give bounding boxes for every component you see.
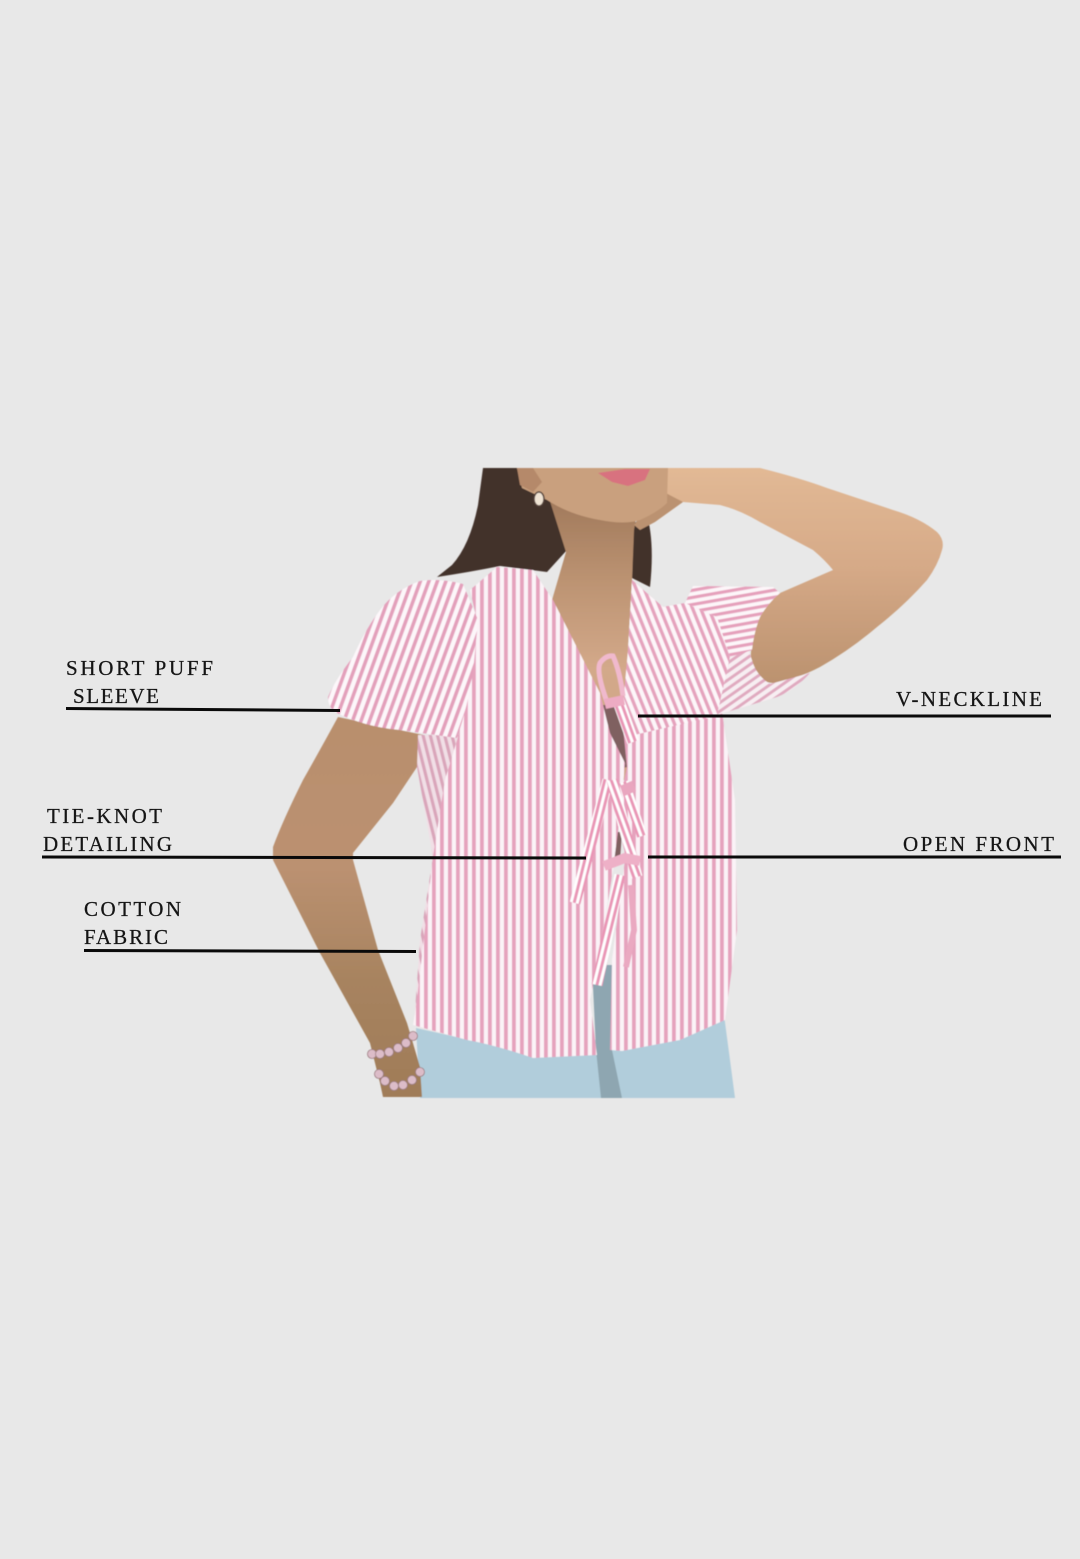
blouse left front panel	[413, 567, 625, 1058]
label: short puff sleeve: SLEEVE	[73, 684, 159, 708]
label: v-neckline: V-NECKLINE	[896, 687, 1042, 711]
wrist shadow	[634, 490, 683, 530]
hair	[437, 468, 652, 587]
blouse right front panel	[610, 580, 737, 1051]
label: short puff sleeve: SHORT PUFF	[66, 656, 213, 680]
blouse back side panel	[414, 735, 470, 1025]
bracelets	[368, 1032, 424, 1090]
label: cotton fabric: FABRIC	[84, 925, 168, 949]
jeans	[416, 965, 735, 1098]
ear	[517, 468, 542, 492]
label: cotton fabric: COTTON	[84, 897, 181, 921]
label: tie-knot detailing: TIE-KNOT	[47, 804, 162, 828]
tie ribbons and knots	[575, 656, 642, 985]
left puff sleeve	[328, 580, 478, 738]
blouse upper right angled panel	[622, 580, 730, 735]
photo: model wearing pink striped blouse	[273, 468, 943, 1098]
label: cotton fabric	[84, 897, 416, 952]
right puff sleeve	[685, 586, 810, 715]
label: short puff sleeve	[66, 656, 340, 710]
lips	[598, 469, 650, 486]
earring	[534, 492, 544, 506]
left arm	[273, 717, 433, 1097]
label: tie-knot detailing: DETAILING	[43, 832, 172, 856]
raised arm and hand	[667, 468, 943, 683]
label: tie-knot detailing	[42, 804, 586, 858]
dark gap at the blouse opening	[603, 705, 627, 860]
neck and chest	[548, 495, 640, 780]
face	[517, 468, 668, 522]
label: open front: OPEN FRONT	[903, 832, 1054, 856]
